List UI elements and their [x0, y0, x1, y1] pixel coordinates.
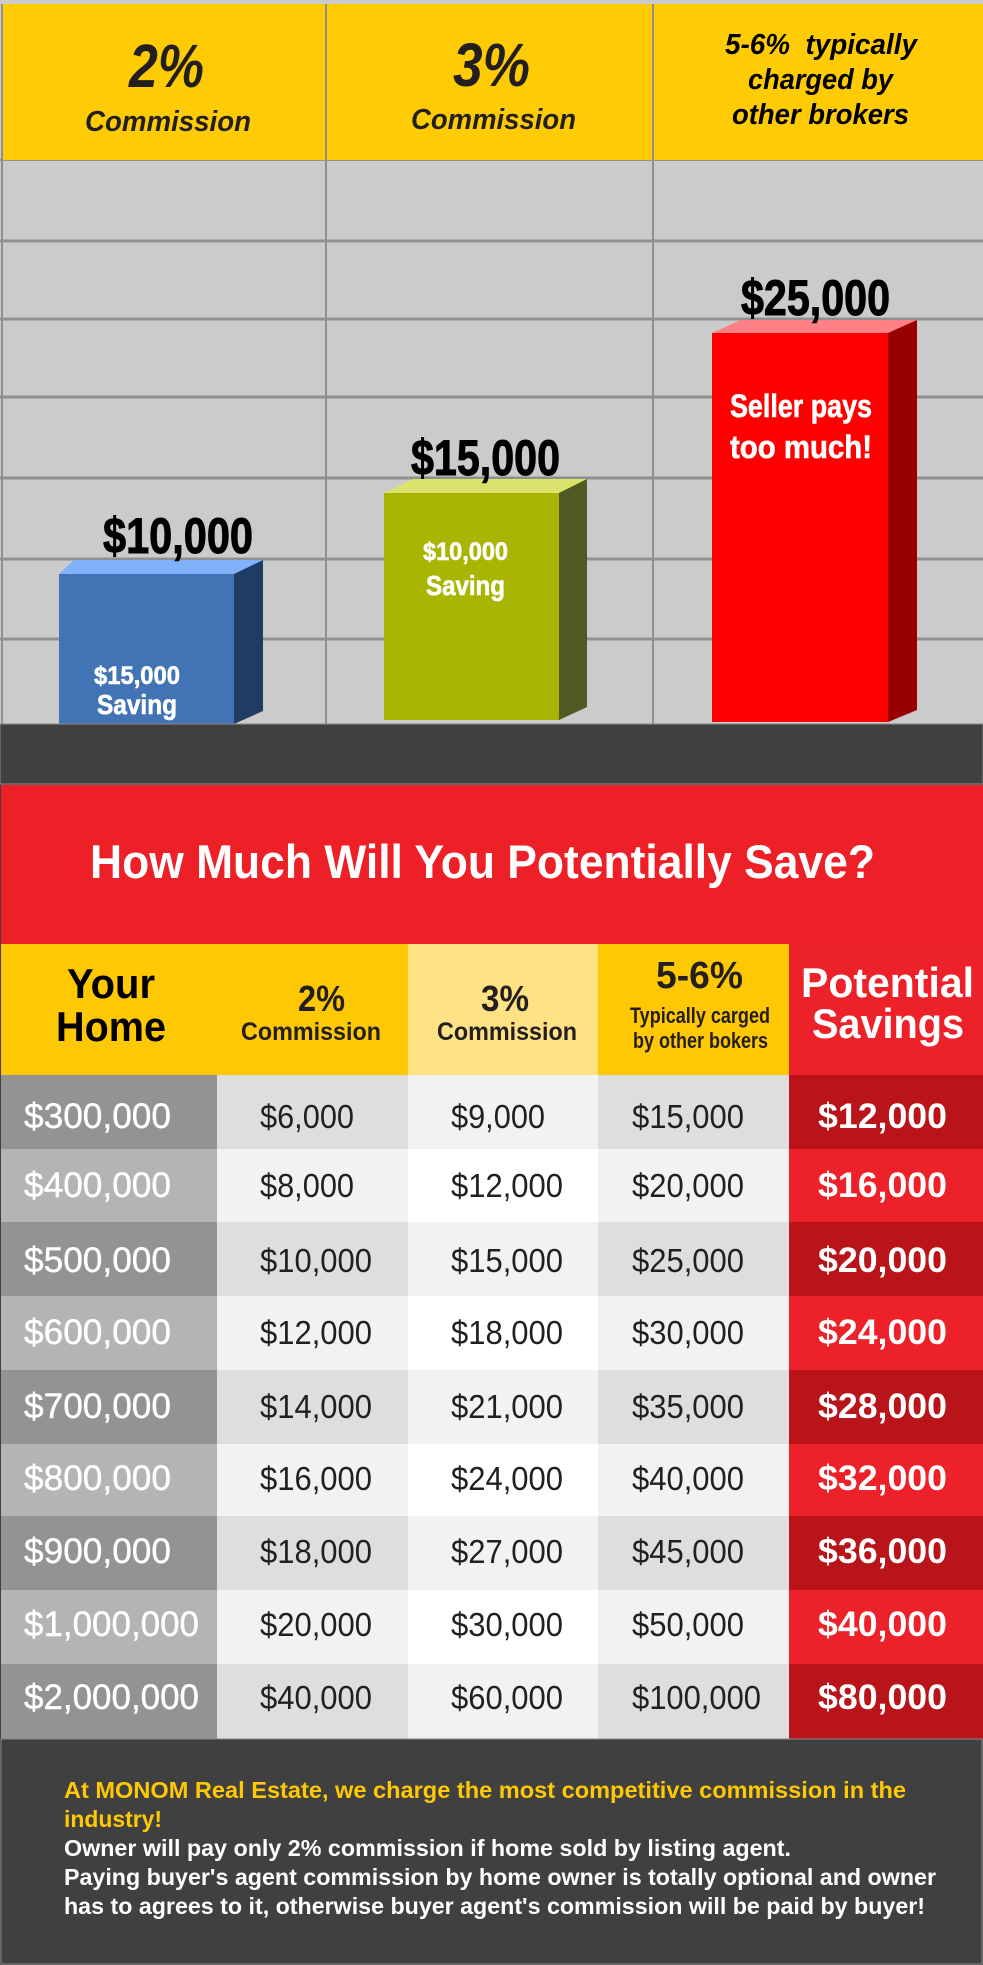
row: $2,000,000: $100,000	[632, 1679, 761, 1716]
row: $2,000,000: $80,000	[818, 1678, 947, 1717]
row: $800,000: $16,000	[260, 1460, 372, 1497]
table header: Typically carged	[630, 1003, 770, 1028]
chart header: commission columns: Commission	[411, 104, 576, 136]
row: $700,000: $21,000	[451, 1388, 563, 1425]
row: $1,000,000: $1,000,000	[24, 1605, 199, 1644]
panel: footer note: Owner will pay only 2% commission if home sold by listing agent.	[64, 1835, 791, 1861]
table header: 3%	[481, 978, 529, 1019]
row: $300,000: $12,000	[818, 1097, 947, 1136]
chart header: commission columns	[3, 4, 983, 160]
table body: commission and savings by home price	[1, 1075, 983, 1739]
chart header: commission columns: other brokers	[732, 99, 909, 131]
row: $500,000: $500,000	[24, 1241, 171, 1280]
row: $900,000: $45,000	[632, 1533, 744, 1570]
table header	[1, 942, 983, 1075]
table header: Your	[67, 960, 155, 1007]
table header: Savings	[812, 1000, 964, 1047]
table header: Commission	[437, 1018, 577, 1046]
chart header: commission columns: 5-6% typically	[725, 29, 919, 61]
panel: footer note: Paying buyer's agent commission by home owner is totally optional and owner	[64, 1864, 936, 1890]
row: $800,000: $800,000	[24, 1459, 171, 1498]
row: $900,000	[24, 1532, 947, 1571]
table header: 2%	[298, 978, 345, 1019]
row: $800,000: $24,000	[451, 1460, 563, 1497]
panel: savings title: How Much Will You Potentially Save?	[90, 835, 875, 888]
row: $500,000: $20,000	[818, 1241, 947, 1280]
bar: 5-6% commission: too much!	[730, 429, 872, 465]
row: $2,000,000	[24, 1678, 947, 1717]
panel: commission bar chart	[0, 0, 983, 724]
row: $900,000: $36,000	[818, 1532, 947, 1571]
table header: by other bokers	[633, 1028, 768, 1053]
row: $700,000: $35,000	[632, 1388, 744, 1425]
row: $900,000: $27,000	[451, 1533, 563, 1570]
bar: 5-6% commission: Seller pays	[730, 388, 872, 424]
row: $600,000	[24, 1313, 947, 1352]
table header: Commission	[241, 1018, 381, 1046]
row: $600,000: $30,000	[632, 1314, 744, 1351]
row: $500,000: $25,000	[632, 1242, 744, 1279]
row: $300,000: $6,000	[260, 1098, 354, 1135]
row: $500,000: $15,000	[451, 1242, 563, 1279]
table header: Potential	[801, 959, 974, 1006]
bar: 3% commission: $15,000	[411, 430, 560, 486]
panel: footer note: has to agrees to it, otherwise buyer agent's commission will be paid by buyer!	[64, 1893, 925, 1919]
row: $500,000	[24, 1241, 947, 1280]
row: $2,000,000: $2,000,000	[24, 1678, 199, 1717]
chart header: commission columns: 3%	[453, 31, 530, 99]
row: $700,000: $14,000	[260, 1388, 372, 1425]
divider band	[0, 724, 983, 784]
row: $1,000,000: $20,000	[260, 1606, 372, 1643]
row: $400,000	[24, 1166, 947, 1205]
bar: 5-6% commission: $25,000	[741, 270, 890, 326]
row: $300,000: $300,000	[24, 1097, 171, 1136]
row: $900,000: $900,000	[24, 1532, 171, 1571]
table header: 5-6%	[656, 955, 743, 997]
row: $800,000: $40,000	[632, 1460, 744, 1497]
row: $2,000,000: $60,000	[451, 1679, 563, 1716]
row: $700,000	[24, 1387, 947, 1426]
row: $500,000: $10,000	[260, 1242, 372, 1279]
row: $1,000,000: $40,000	[818, 1605, 947, 1644]
row: $400,000: $20,000	[632, 1167, 744, 1204]
bar: 2% commission: $15,000	[94, 662, 180, 690]
panel: footer note	[1, 1739, 982, 1964]
bar: 5-6% commission	[712, 270, 917, 722]
row: $1,000,000	[24, 1605, 947, 1644]
bar: 3% commission	[384, 430, 587, 720]
row: $600,000: $12,000	[260, 1314, 372, 1351]
chart header: commission columns: Commission	[85, 106, 251, 138]
chart header: commission columns: 2%	[128, 32, 204, 100]
bar: 3% commission: $10,000	[423, 538, 508, 566]
row: $400,000: $8,000	[260, 1167, 354, 1204]
panel: savings title	[1, 785, 983, 944]
row: $800,000: $32,000	[818, 1459, 947, 1498]
row: $400,000: $16,000	[818, 1166, 947, 1205]
bar: 2% commission	[59, 508, 263, 724]
panel: footer note: industry!	[64, 1806, 162, 1832]
row: $400,000: $400,000	[24, 1166, 171, 1205]
row: $1,000,000: $50,000	[632, 1606, 744, 1643]
row: $400,000: $12,000	[451, 1167, 563, 1204]
bar: 2% commission: $10,000	[103, 508, 253, 564]
chart header: commission columns: charged by	[748, 64, 895, 96]
row: $1,000,000: $30,000	[451, 1606, 563, 1643]
table header: Home	[56, 1003, 166, 1050]
row: $600,000: $24,000	[818, 1313, 947, 1352]
row: $300,000: $15,000	[632, 1098, 744, 1135]
row: $700,000: $28,000	[818, 1387, 947, 1426]
row: $700,000: $700,000	[24, 1387, 171, 1426]
row: $600,000: $18,000	[451, 1314, 563, 1351]
row: $900,000: $18,000	[260, 1533, 372, 1570]
bar: 3% commission: Saving	[426, 570, 505, 601]
bar: 2% commission: Saving	[97, 689, 177, 720]
panel: footer note: At MONOM Real Estate, we charge the most competitive commission in the	[64, 1777, 906, 1803]
row: $600,000: $600,000	[24, 1313, 171, 1352]
row: $800,000	[24, 1459, 947, 1498]
row: $300,000	[24, 1097, 947, 1136]
row: $2,000,000: $40,000	[260, 1679, 372, 1716]
row: $300,000: $9,000	[451, 1098, 545, 1135]
